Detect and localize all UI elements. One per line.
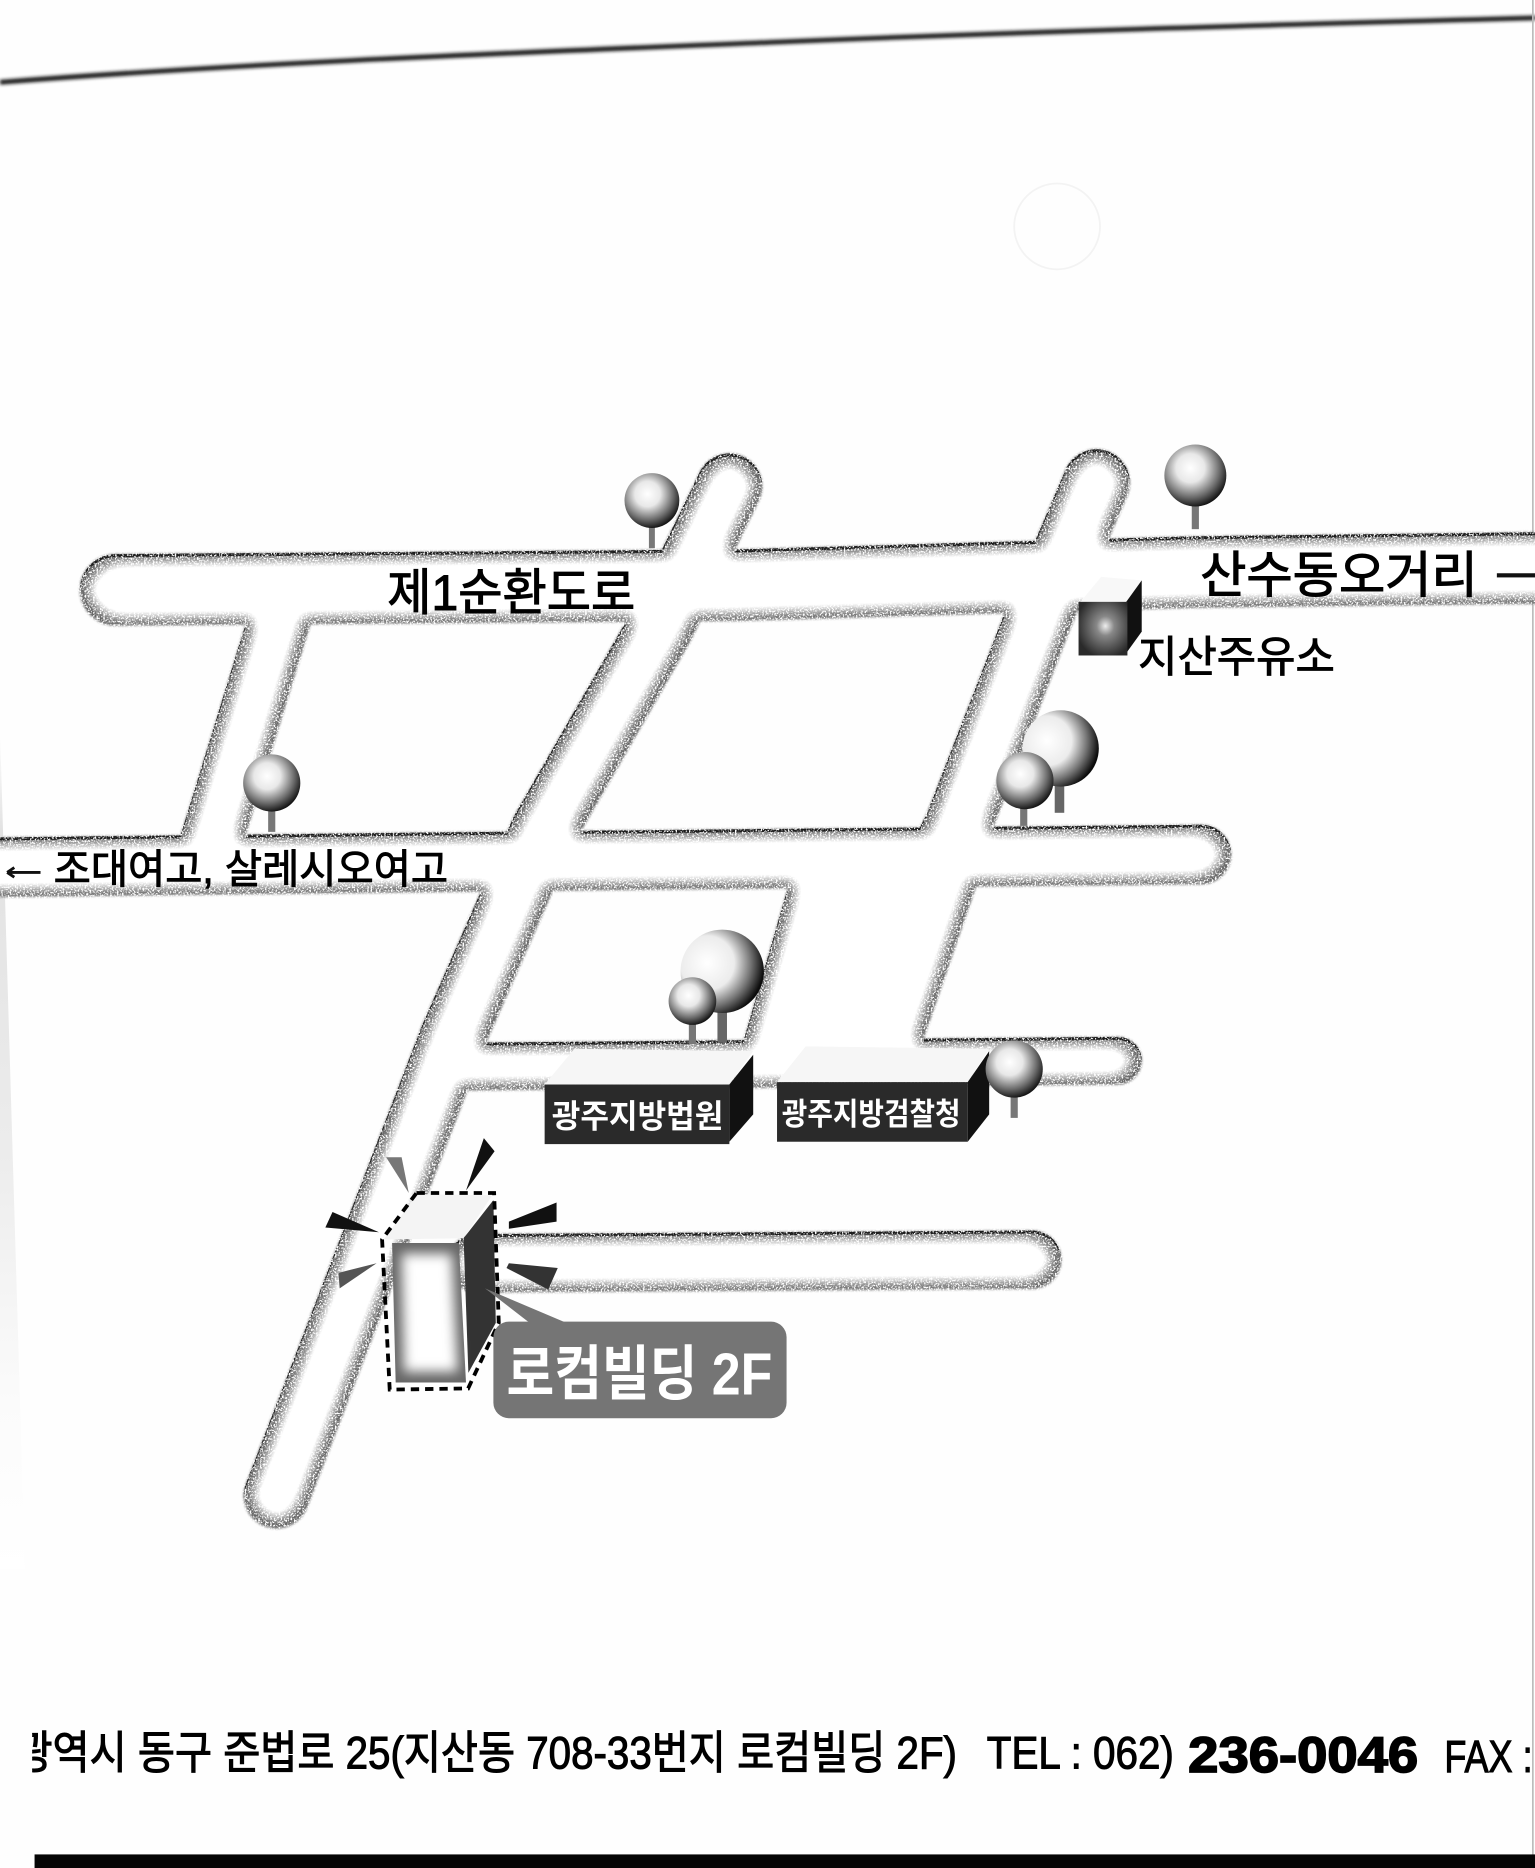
address and contact line [32,1730,1530,1778]
label: 지산주유소: 지산주유소 [1138,634,1335,682]
building: 광주지방검찰청 [777,1046,989,1142]
callout text: 로컴빌딩 2F [507,1340,772,1407]
road: left diagonal [210,614,281,846]
arrow: to schools [7,868,41,877]
burst rays around target building [325,1138,558,1290]
road: middle street [0,855,1201,868]
target building: 로컴빌딩 [382,1193,499,1390]
road: court street [459,1061,1118,1067]
road: right diagonal [918,483,1096,906]
building label: 광주지방검찰청 [782,1097,961,1132]
telephone prefix: TEL : 062) [987,1728,1174,1779]
telephone number: 236-0046 [1188,1727,1418,1783]
tree [243,754,300,832]
dashed outline [382,1193,499,1390]
road: 제1순환도로 [116,567,1535,590]
bottom black band [35,1854,1535,1868]
tree [624,473,679,548]
road: lower street [477,1260,1032,1263]
road: plaza [741,876,980,1049]
left paper edge shadow [0,729,25,1570]
label: 산수동오거리: 산수동오거리 [1200,547,1478,603]
building: gas station [1079,577,1142,655]
tree [986,1040,1043,1118]
building: 광주지방법원 [545,1049,753,1144]
right paper edge [1532,0,1534,1868]
tree pair: upper right [996,710,1099,826]
building label: 광주지방법원 [552,1098,723,1134]
road labels [7,547,1535,892]
callout: 로컴빌딩 2F [485,1288,787,1418]
arrow: to 산수동오거리 [1497,573,1535,577]
road network [0,483,1535,1496]
top scan line [0,18,1535,82]
label: schools: 조대여고, 살레시오여고 [54,846,448,892]
faint circular stain [1014,184,1100,269]
label: 제1순환도로: 제1순환도로 [387,565,635,621]
road: main diagonal [276,486,729,1496]
address: 광역시 동구 준법로 25(지산동 708-33번지 로컴빌딩 2F) [15,1728,957,1779]
tree [1164,445,1226,529]
tree pair: near court [669,930,764,1044]
